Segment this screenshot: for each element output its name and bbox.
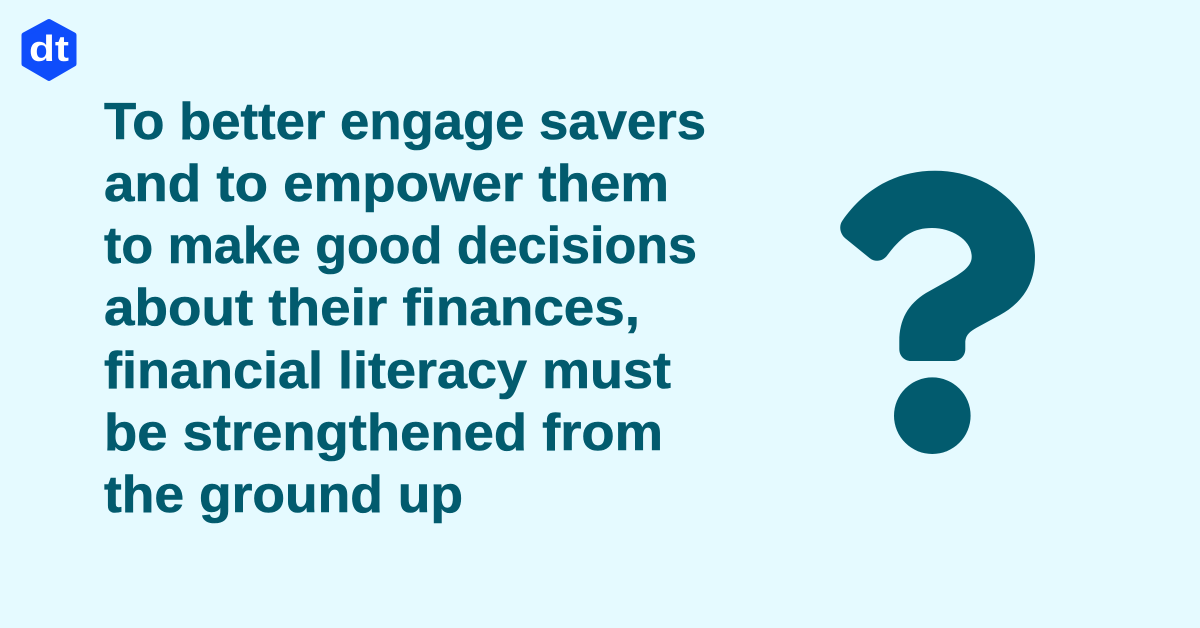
logo: dt hexagon badge xyxy=(24,22,74,78)
headline text: about their finances, xyxy=(104,279,640,337)
headline text: be strengthened from xyxy=(104,404,663,462)
headline text xyxy=(104,93,706,524)
headline text: To better engage savers xyxy=(104,93,706,151)
logo: dt hexagon badge: dt xyxy=(29,28,69,69)
headline text: and to empower them xyxy=(104,155,669,213)
headline text: financial literacy must xyxy=(104,342,671,400)
icon: question mark xyxy=(840,171,1035,454)
headline text: to make good decisions xyxy=(104,217,697,275)
headline text: the ground up xyxy=(104,466,463,524)
